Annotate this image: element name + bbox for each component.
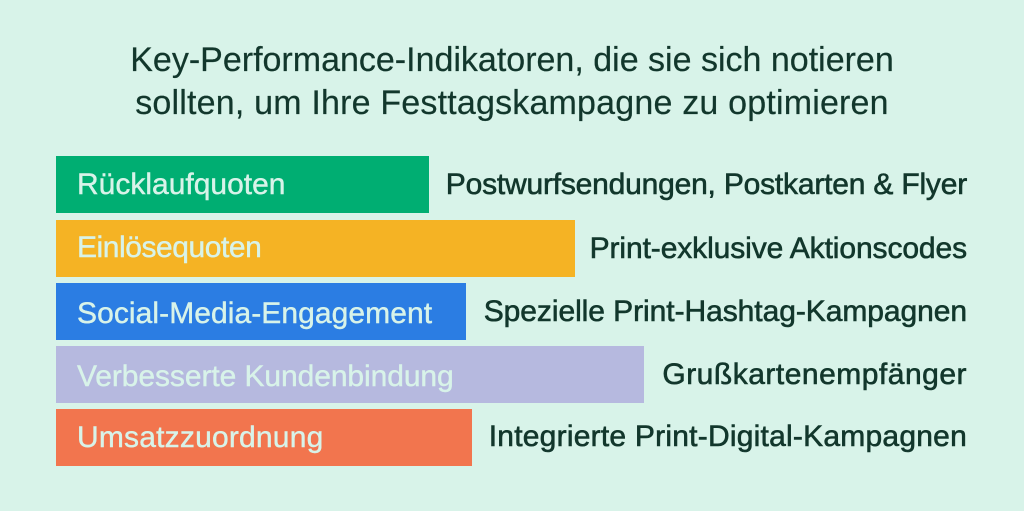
bar: Einlösequoten (56, 220, 575, 277)
description: Umsatzzuordnung: Integrierte Print-Digital-Kampagnen (489, 420, 967, 453)
bar label: Umsatzzuordnung: Umsatzzuordnung (77, 421, 323, 454)
bar label: Einlösequoten: Einlösequoten (77, 231, 261, 264)
bar: Social-Media-Engagement (56, 283, 466, 340)
title (130, 41, 894, 122)
bar label: Rücklaufquoten: Rücklaufquoten (77, 168, 285, 201)
description: Verbesserte Kundenbindung: Grußkartenempfänger (662, 358, 967, 391)
description: Social-Media-Engagement: Spezielle Print-Hashtag-Kampagnen (484, 295, 967, 328)
bar: Rücklaufquoten (56, 156, 429, 213)
description: Rücklaufquoten: Postwurfsendungen, Postkarten & Flyer (446, 168, 967, 201)
title: Key-Performance-Indikatoren, die sie sich notieren (130, 41, 894, 79)
bar: Verbesserte Kundenbindung (56, 346, 644, 403)
title: sollten, um Ihre Festtagskampagne zu optimieren (135, 84, 889, 122)
description: Einlösequoten: Print-exklusive Aktionscodes (590, 232, 967, 265)
bar label: Verbesserte Kundenbindung: Verbesserte Kundenbindung (77, 360, 454, 393)
bar label: Social-Media-Engagement: Social-Media-Engagement (77, 297, 432, 330)
bar: Umsatzzuordnung (56, 409, 472, 466)
